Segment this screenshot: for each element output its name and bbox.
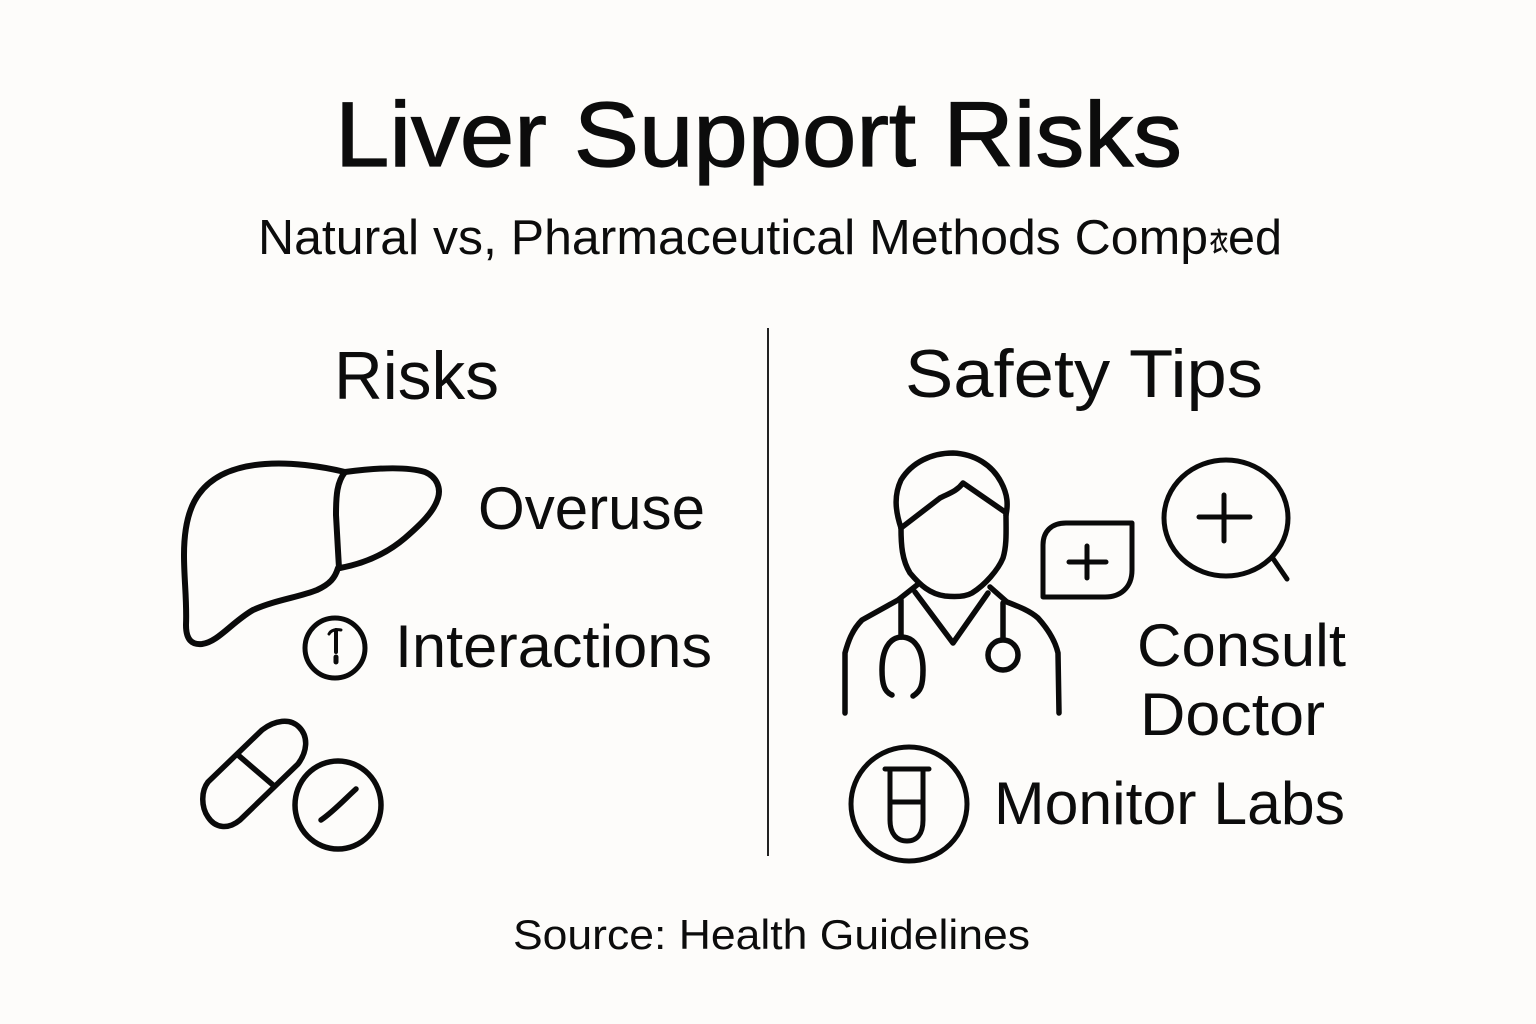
subtitle: Natural vs, Pharmaceutical Methods Comp (258, 211, 1208, 265)
icon: magnifier with plus (1164, 460, 1288, 579)
center divider (767, 328, 769, 856)
stethoscope right (1000, 603, 1006, 638)
icon: pill with no-sign circle (203, 721, 381, 849)
source: Source: Health Guidelines (513, 911, 1030, 958)
subtitle: 衣 (1210, 227, 1228, 257)
label: consult doctor: Doctor (1140, 681, 1325, 748)
hair (896, 453, 1007, 528)
label: consult doctor (1137, 612, 1346, 748)
icon: interaction alert (305, 618, 365, 678)
label: monitor labs: Monitor Labs (994, 770, 1345, 837)
icon: doctor (845, 453, 1059, 713)
label: overuse: Overuse (478, 475, 705, 542)
heading: risks: Risks (334, 338, 499, 414)
label: interactions: Interactions (395, 613, 712, 680)
subtitle: ed (1228, 211, 1282, 265)
icon: test tube (851, 747, 967, 861)
face (901, 515, 1006, 597)
heading: safety tips: Safety Tips (905, 336, 1263, 412)
collar (915, 592, 988, 643)
icon: medical bubble (1043, 523, 1132, 597)
hairline (901, 483, 1005, 528)
icon: liver (184, 463, 439, 644)
label: consult doctor: Consult (1137, 612, 1346, 679)
stethoscope left (898, 600, 904, 637)
shoulders (845, 585, 917, 713)
title: Liver Support Risks (335, 84, 1182, 186)
